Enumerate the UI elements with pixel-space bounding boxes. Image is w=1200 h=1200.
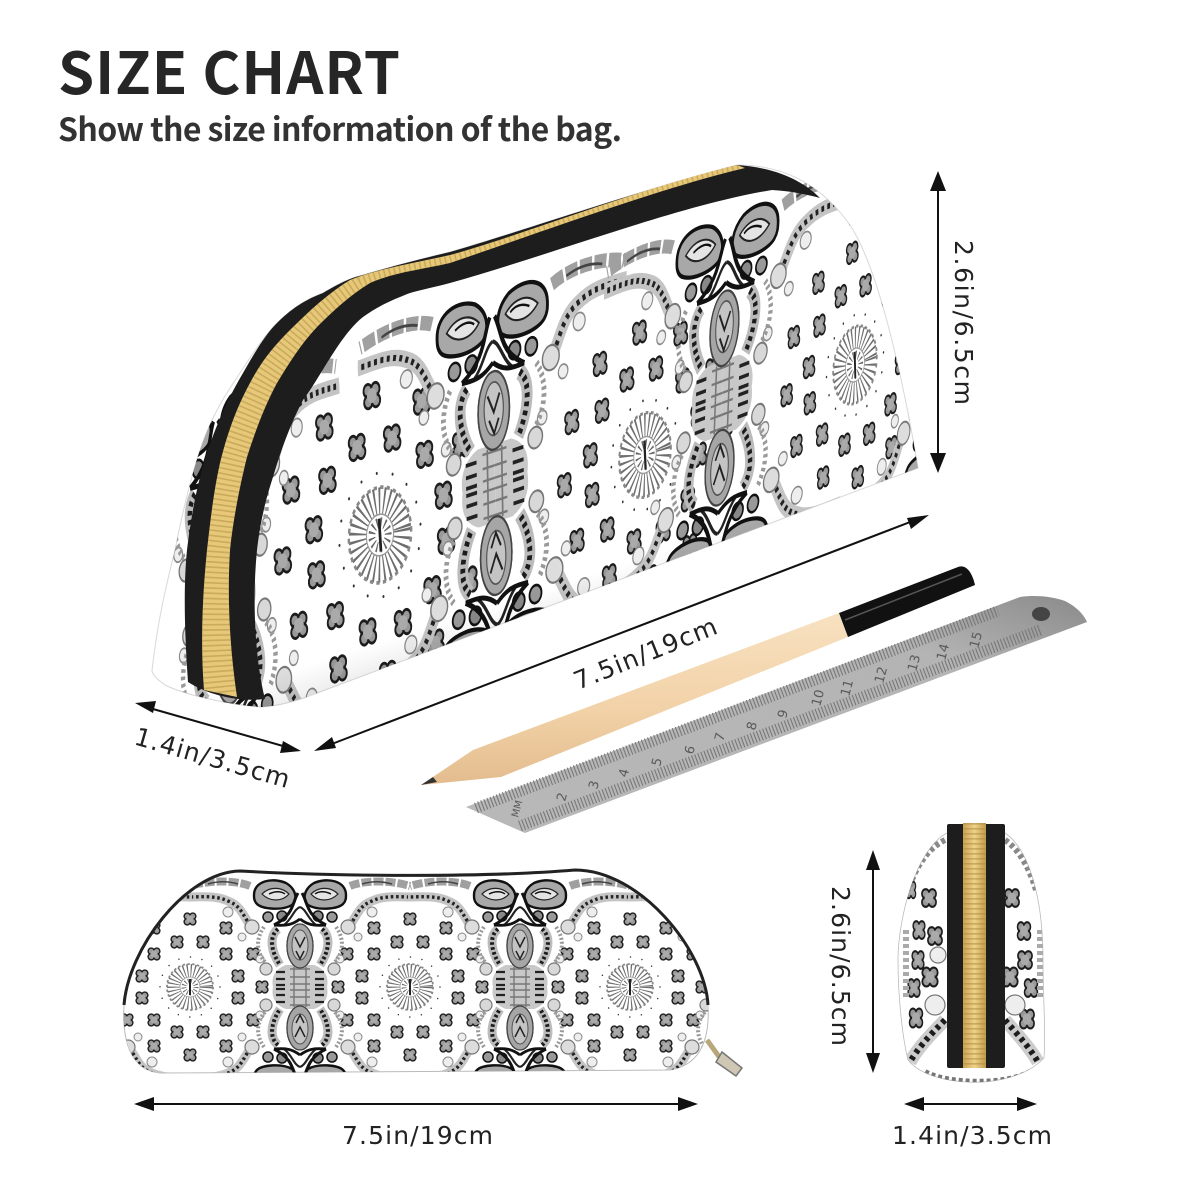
ruler: 7 (712, 731, 729, 743)
bag: front view (122, 868, 743, 1077)
ruler: 4 (616, 767, 633, 779)
arrow: bag depth (135, 701, 301, 753)
label: front width: 7.5in/19cm (342, 1121, 493, 1150)
ruler: 3 (586, 779, 603, 791)
ruler (466, 596, 1087, 833)
bag: end view (898, 823, 1045, 1082)
arrow: bag height (930, 171, 946, 473)
title: SIZE CHART (58, 27, 400, 111)
zipper pull (707, 1040, 742, 1076)
label: bag height: 2.6in/6.5cm (949, 240, 978, 405)
label: end view depth: 1.4in/3.5cm (892, 1121, 1052, 1150)
ruler: 15 (967, 630, 986, 650)
black zipper tape (185, 165, 820, 700)
ruler: 11 (838, 678, 857, 698)
arrow: end view height (866, 850, 880, 1073)
bag: perspective view (152, 164, 918, 708)
arrow: bag length (314, 515, 929, 751)
ruler: 13 (905, 653, 924, 673)
arrow: front width (134, 1097, 698, 1111)
label: bag depth: 1.4in/3.5cm (131, 722, 293, 794)
ruler: 14 (934, 642, 953, 662)
arrow: end view depth (904, 1097, 1037, 1111)
ruler: 2 (554, 791, 571, 803)
black zipper tape (947, 824, 1005, 1068)
ruler: MM (510, 799, 525, 819)
pencil (421, 566, 975, 785)
subtitle: Show the size information of the bag. (58, 105, 622, 151)
ruler: 10 (809, 688, 828, 708)
ruler: 6 (682, 744, 699, 756)
ruler: 9 (775, 708, 792, 720)
ruler: 12 (872, 665, 891, 685)
ruler: 8 (744, 720, 761, 732)
label: end view height: 2.6in/6.5cm (826, 886, 855, 1046)
label: bag length: 7.5in/19cm (569, 612, 721, 696)
ruler: 5 (649, 756, 666, 768)
gold zipper teeth (202, 165, 745, 697)
gold zipper teeth (963, 823, 986, 1068)
